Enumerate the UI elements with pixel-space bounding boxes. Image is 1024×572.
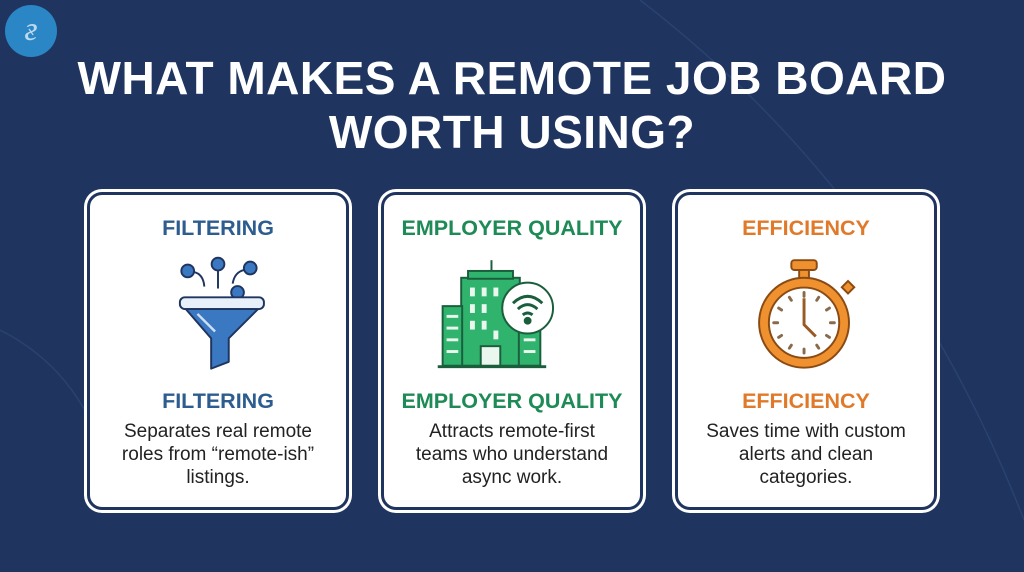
heading: employer quality bottom: EMPLOYER QUALITY xyxy=(402,389,622,413)
logo: ғ xyxy=(24,11,38,48)
text: efficiency: alerts and clean xyxy=(739,444,873,465)
title: WHAT MAKES A REMOTE JOB BOARD xyxy=(78,52,946,104)
text: filtering: listings. xyxy=(186,467,250,488)
text: efficiency: Saves time with custom xyxy=(706,421,906,442)
heading: efficiency bottom: EFFICIENCY xyxy=(742,389,870,413)
text: filtering xyxy=(122,421,314,488)
text: employer quality: Attracts remote-first xyxy=(429,421,595,442)
heading: employer quality: EMPLOYER QUALITY xyxy=(402,216,622,240)
title: WORTH USING? xyxy=(329,106,695,158)
text: efficiency: categories. xyxy=(760,467,852,488)
logo xyxy=(5,5,57,57)
panel: filtering xyxy=(84,189,352,513)
icon: stopwatch xyxy=(758,259,856,369)
title xyxy=(78,52,946,158)
text: efficiency xyxy=(706,421,906,488)
icon: funnel xyxy=(178,256,265,370)
icon: building with wifi xyxy=(438,260,554,368)
panel: efficiency xyxy=(672,189,940,513)
text: filtering: roles from “remote-ish” xyxy=(122,444,314,465)
heading: efficiency: EFFICIENCY xyxy=(742,216,870,240)
text: employer quality xyxy=(416,421,608,488)
heading: filtering: FILTERING xyxy=(162,216,274,240)
text: employer quality: teams who understand xyxy=(416,444,608,465)
text: employer quality: async work. xyxy=(462,467,562,488)
text: filtering: Separates real remote xyxy=(124,421,312,442)
heading: filtering bottom: FILTERING xyxy=(162,389,274,413)
panel: employer quality xyxy=(378,189,646,513)
